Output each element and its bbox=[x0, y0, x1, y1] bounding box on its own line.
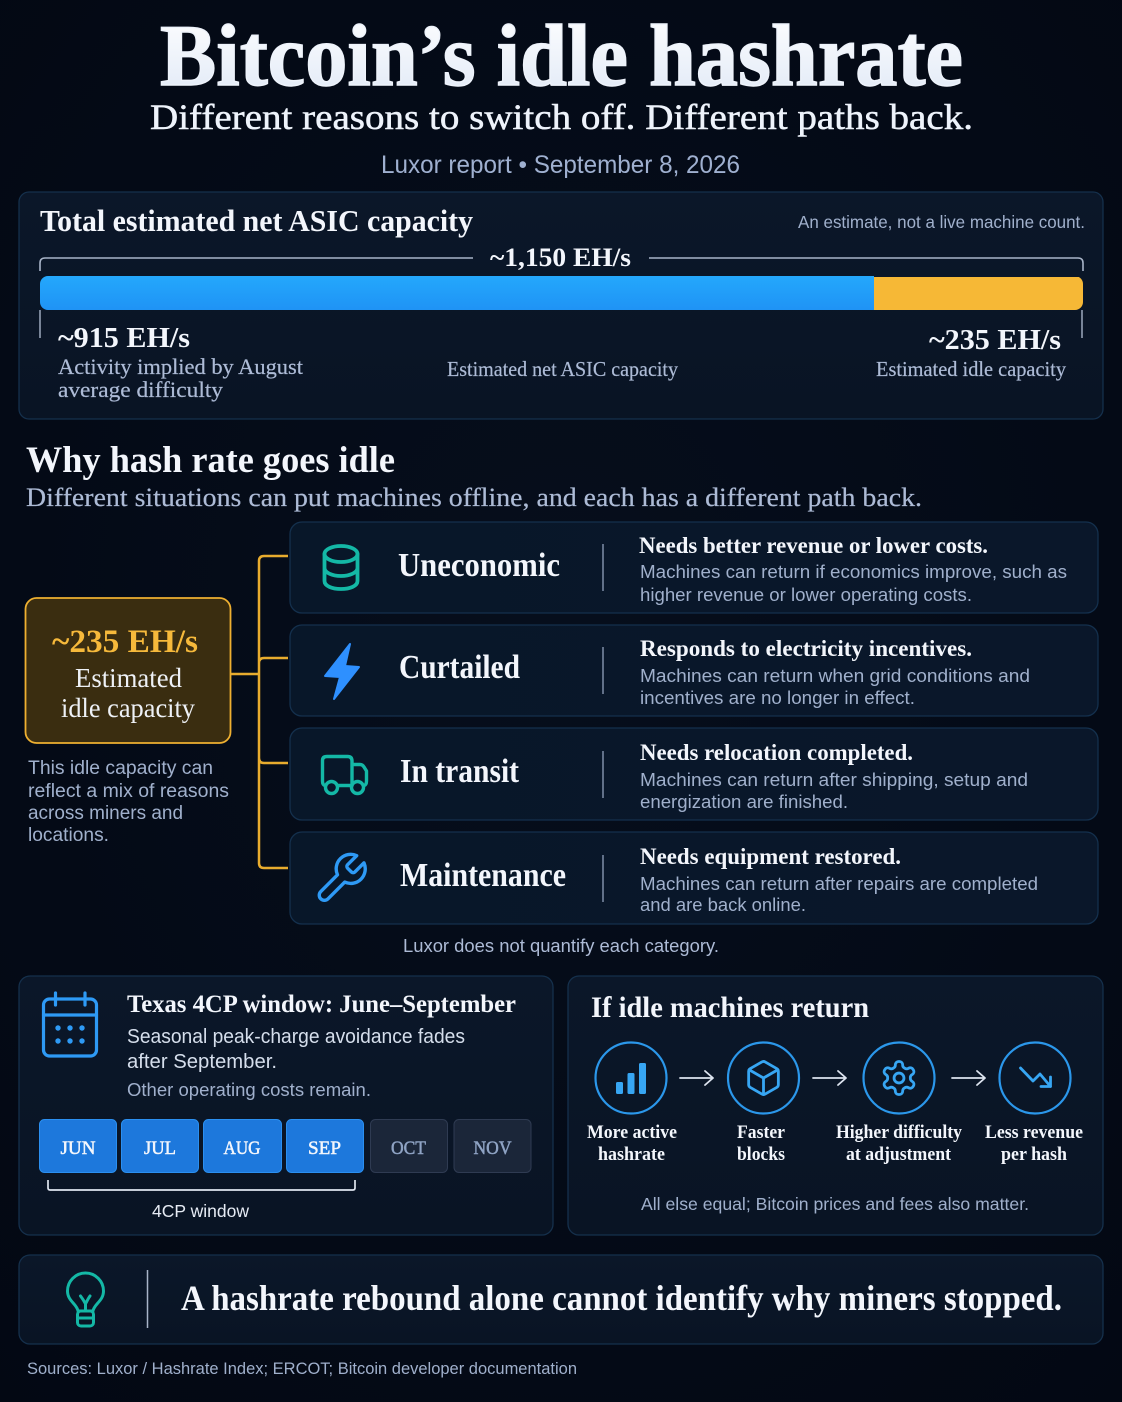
step: more active hashrate bbox=[587, 1042, 677, 1165]
arrow bbox=[680, 1071, 713, 1085]
description bbox=[640, 844, 1038, 915]
step: more active hashrate: hashrate bbox=[598, 1145, 665, 1165]
active capacity label bbox=[58, 323, 303, 402]
note: estimate: An estimate, not a live machine count. bbox=[798, 212, 1085, 232]
title: Bitcoin’s idle hashrate bbox=[160, 8, 963, 105]
arrow bbox=[952, 1071, 985, 1085]
step: faster blocks: Faster bbox=[737, 1123, 785, 1143]
panel: Texas 4CP window bbox=[19, 976, 553, 1235]
step: faster blocks bbox=[728, 1042, 799, 1165]
heading: 4CP window: Texas 4CP window: June–September bbox=[127, 989, 516, 1018]
description bbox=[639, 533, 1067, 605]
description: Machines can return after shipping, setup and bbox=[640, 770, 1028, 790]
description: Machines can return after repairs are completed bbox=[640, 874, 1038, 894]
connector lines bbox=[231, 556, 288, 868]
idle capacity label: Estimated idle capacity bbox=[876, 357, 1066, 381]
panel: takeaway bbox=[19, 1255, 1103, 1344]
label: Uneconomic bbox=[398, 547, 560, 584]
description: Needs equipment restored. bbox=[640, 844, 901, 869]
step: faster blocks: blocks bbox=[737, 1145, 785, 1165]
step: higher difficulty bbox=[836, 1042, 963, 1165]
icon: lightning bolt bbox=[325, 644, 359, 699]
category note: Luxor does not quantify each category. bbox=[403, 936, 719, 956]
label: Curtailed bbox=[399, 649, 520, 686]
icon: light bulb bbox=[68, 1273, 104, 1326]
month chips: NOV bbox=[474, 1139, 512, 1159]
step: less revenue: per hash bbox=[1001, 1145, 1068, 1165]
month chips: SEP bbox=[308, 1139, 341, 1159]
idle capacity label: ~235 EH/s bbox=[929, 325, 1061, 356]
total value: ~1,150 EH/s bbox=[490, 243, 631, 272]
step: less revenue bbox=[985, 1042, 1083, 1165]
panel: total capacity bbox=[19, 192, 1103, 419]
panel: if idle machines return bbox=[568, 976, 1103, 1235]
caveat note: All else equal; Bitcoin prices and fees also matter. bbox=[641, 1194, 1029, 1214]
month chips bbox=[40, 1120, 531, 1172]
net capacity label: Estimated net ASIC capacity bbox=[447, 357, 678, 381]
month chips: OCT bbox=[391, 1139, 426, 1159]
icon: database bbox=[324, 546, 358, 589]
takeaway text: A hashrate rebound alone cannot identify why miners stopped. bbox=[181, 1278, 1062, 1318]
heading: return: If idle machines return bbox=[591, 991, 869, 1024]
description: energization are finished. bbox=[640, 792, 848, 812]
callout: idle capacity box: ~235 EH/s bbox=[52, 624, 198, 660]
description: Machines can return when grid conditions and bbox=[640, 666, 1030, 686]
total bracket bbox=[40, 258, 1083, 271]
card: maintenance bbox=[290, 832, 1098, 924]
step: more active hashrate: More active bbox=[587, 1123, 677, 1143]
stacked capacity bar bbox=[40, 276, 1083, 338]
step: higher difficulty: Higher difficulty bbox=[836, 1123, 963, 1143]
description: incentives are no longer in effect. bbox=[640, 688, 915, 708]
description: Machines can return if economics improve, such as bbox=[640, 562, 1067, 582]
icon: wrench bbox=[319, 854, 365, 900]
window bracket bbox=[48, 1180, 355, 1190]
card: in transit bbox=[290, 728, 1098, 820]
section subheading: Different situations can put machines offline, and each has a different path back. bbox=[26, 483, 922, 512]
icon: calendar bbox=[44, 993, 96, 1056]
explanation: Seasonal peak-charge avoidance fades bbox=[127, 1025, 465, 1048]
idle capacity note: across miners and bbox=[28, 803, 183, 824]
step: higher difficulty: at adjustment bbox=[846, 1145, 952, 1165]
idle capacity note: reflect a mix of reasons bbox=[28, 781, 229, 802]
description: Responds to electricity incentives. bbox=[640, 636, 972, 661]
active capacity label: ~915 EH/s bbox=[58, 323, 190, 354]
description: Needs better revenue or lower costs. bbox=[639, 533, 988, 558]
idle capacity note: This idle capacity can bbox=[28, 758, 213, 779]
idle capacity label bbox=[876, 325, 1066, 381]
callout: idle capacity box bbox=[26, 598, 230, 743]
month chips: AUG bbox=[224, 1139, 260, 1159]
report byline: Luxor report • September 8, 2026 bbox=[381, 151, 740, 179]
idle capacity note bbox=[28, 758, 229, 846]
subtitle: Different reasons to switch off. Different paths back. bbox=[150, 97, 973, 137]
explanation: after September. bbox=[127, 1050, 277, 1073]
month chips: JUL bbox=[144, 1139, 176, 1159]
callout: idle capacity box: idle capacity bbox=[61, 693, 195, 723]
active capacity label: average difficulty bbox=[58, 377, 223, 402]
description bbox=[640, 740, 1028, 812]
step: less revenue: Less revenue bbox=[985, 1123, 1083, 1143]
explanation bbox=[127, 1025, 465, 1100]
bracket label: 4CP window bbox=[152, 1201, 249, 1221]
active capacity label: Activity implied by August bbox=[58, 354, 303, 379]
arrow bbox=[813, 1071, 846, 1085]
description: higher revenue or lower operating costs. bbox=[640, 585, 972, 605]
card: curtailed bbox=[290, 625, 1098, 716]
section heading: why idle: Why hash rate goes idle bbox=[26, 440, 395, 481]
label: Maintenance bbox=[400, 857, 566, 894]
description bbox=[640, 636, 1030, 708]
description: Needs relocation completed. bbox=[640, 740, 913, 765]
description: and are back online. bbox=[640, 895, 806, 915]
label: In transit bbox=[400, 753, 520, 790]
explanation: Other operating costs remain. bbox=[127, 1079, 371, 1100]
card: uneconomic bbox=[290, 522, 1098, 613]
sources: Sources: Luxor / Hashrate Index; ERCOT; Bitcoin developer documentation bbox=[27, 1360, 577, 1378]
callout: idle capacity box: Estimated bbox=[75, 663, 182, 693]
icon: truck bbox=[322, 756, 366, 794]
idle capacity note: locations. bbox=[28, 825, 109, 846]
heading: total capacity: Total estimated net ASIC capacity bbox=[40, 203, 473, 238]
month chips: JUN bbox=[60, 1139, 96, 1159]
